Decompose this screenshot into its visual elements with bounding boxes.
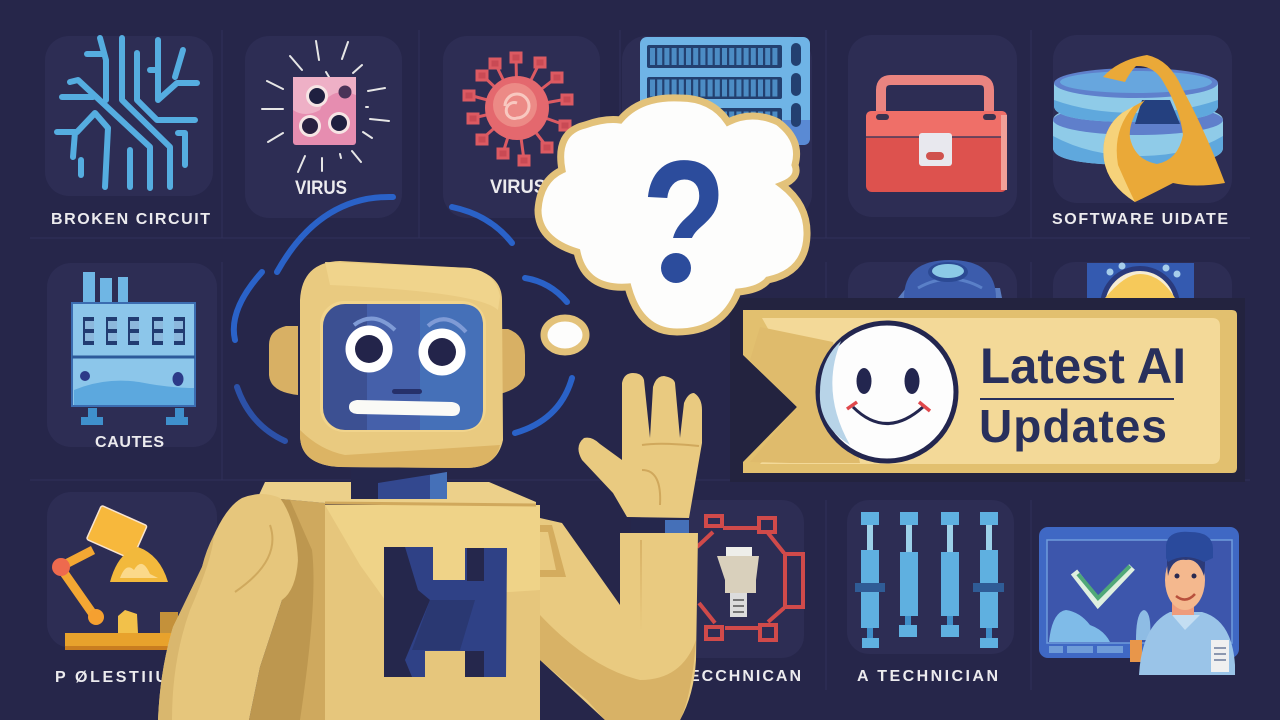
- icon: machine: [72, 272, 195, 425]
- panel: technician chip: [640, 500, 804, 685]
- icon: tubes: [855, 512, 1004, 648]
- arrow ring: dashed arcs around robot: [234, 197, 572, 441]
- banner: [730, 298, 1245, 482]
- icon: server rack: [640, 37, 810, 145]
- icon: button: [898, 260, 1002, 298]
- label: technician 2: A TECHNICIAN: [857, 668, 998, 685]
- robot head: [300, 261, 503, 468]
- panel: software update: [1052, 35, 1232, 228]
- smiley: [818, 323, 956, 461]
- panel: toolbox: [848, 35, 1017, 217]
- robot screen: [320, 301, 486, 432]
- label: virus 2: VIRUS: [490, 177, 546, 198]
- panel: virus microbe: [443, 36, 600, 218]
- label: cautes: CAUTES: [95, 434, 164, 451]
- robot ears: [269, 326, 525, 395]
- question mark: [648, 160, 718, 283]
- panel: gauge icon: [1053, 262, 1232, 346]
- panel: virus chip: [245, 36, 402, 218]
- icon: gauge: [1087, 262, 1194, 346]
- panel: polishing: [47, 492, 217, 686]
- robot right arm: [540, 518, 698, 720]
- question mark: ?: [642, 123, 726, 321]
- label: software update: SOFTWARE UIDATE: [1052, 211, 1228, 228]
- panel: button icon: [848, 260, 1017, 322]
- icon: broken circuit: [57, 38, 197, 188]
- banner text: Latest AI: [980, 338, 1186, 394]
- icon: database with arrow: [1053, 55, 1225, 202]
- icon: toolbox: [866, 80, 1007, 192]
- panel: broken circuit: [45, 36, 213, 228]
- label: broken circuit: BROKEN CIRCUIT: [51, 211, 210, 228]
- panel: syringes: [847, 500, 1014, 685]
- label: technician 1: ECCHNICAN: [689, 668, 801, 685]
- panel: technician monitor: [1039, 527, 1239, 675]
- icon: technician: [1130, 532, 1235, 675]
- banner text: Updates: [979, 400, 1167, 452]
- robot body: [158, 482, 540, 720]
- robot eyes and mouth: [346, 319, 466, 416]
- label: polishing: P ØLESTIIU: [55, 669, 167, 686]
- small thought bubble: [544, 318, 586, 352]
- panel: server rack: [622, 36, 812, 218]
- thought bubble: [538, 98, 807, 332]
- panel: cautes: [47, 263, 217, 451]
- icon: chip network: [697, 516, 803, 640]
- label: virus 1: VIRUS: [295, 178, 347, 199]
- robot chest emblem: [384, 547, 507, 677]
- robot raised hand: [578, 373, 702, 533]
- banner text: [979, 338, 1186, 452]
- robot neck: [351, 466, 447, 499]
- icon: monitor with checkmark: [1039, 527, 1239, 658]
- robot: [158, 261, 702, 720]
- icon: virus chip: [262, 41, 389, 172]
- icon: virus microbe: [464, 53, 572, 165]
- icon: hammer lamp: [52, 505, 185, 650]
